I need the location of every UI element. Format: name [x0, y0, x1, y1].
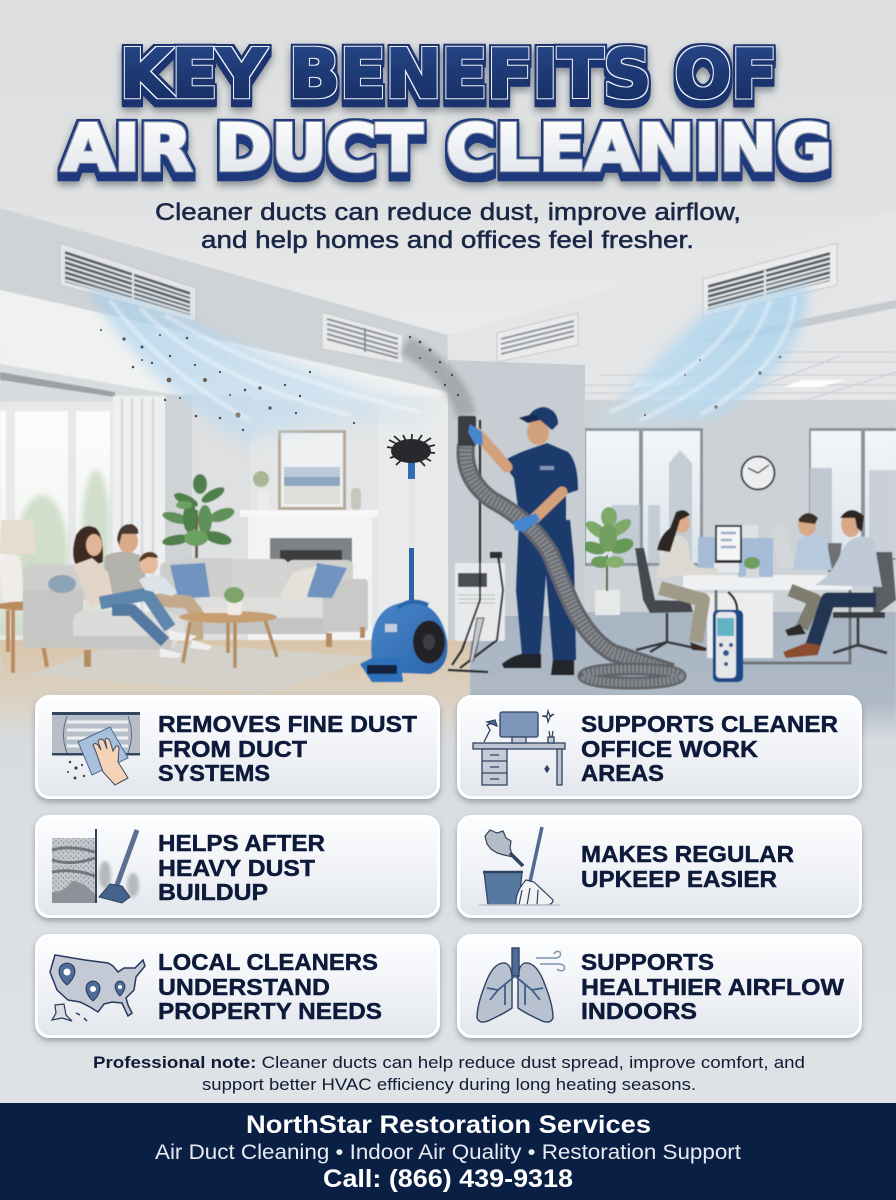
card: local cleaners	[36, 936, 438, 1036]
dust and airflow streams	[85, 284, 808, 445]
subtitle: and help homes and offices feel fresher.	[201, 227, 694, 254]
hose	[466, 445, 672, 672]
white column	[378, 395, 448, 642]
professional note: Professional note: Cleaner ducts can help reduce dust spread, improve comfort, and	[93, 1053, 805, 1072]
card text	[158, 830, 325, 905]
card text: INDOORS	[581, 998, 697, 1024]
air blower	[360, 602, 447, 682]
icon: office desk	[473, 711, 565, 785]
office man with headset	[783, 510, 896, 658]
card text	[158, 949, 382, 1024]
worker legs	[516, 520, 576, 660]
wall art	[278, 430, 346, 510]
wall clock	[742, 456, 774, 490]
card text: SUPPORTS CLEANER	[581, 711, 838, 737]
scene: office	[448, 210, 896, 740]
professional note	[93, 1053, 805, 1094]
card text: SYSTEMS	[158, 760, 270, 786]
card text: HELPS AFTER	[158, 830, 325, 856]
office plant	[581, 507, 636, 615]
card text: UPKEEP EASIER	[581, 866, 777, 892]
card text	[581, 711, 838, 786]
plant	[161, 474, 236, 558]
card text	[158, 711, 417, 786]
worker with hose	[458, 407, 680, 683]
card text: UNDERSTAND	[158, 974, 330, 1000]
icon: lungs with wind	[477, 948, 564, 1022]
brush pole	[387, 434, 435, 604]
center column wall	[448, 360, 585, 640]
office ceiling tiles	[585, 293, 896, 402]
worker torso	[505, 443, 578, 522]
sofa	[23, 558, 368, 667]
card text: REMOVES FINE DUST	[158, 711, 417, 737]
middle left vent	[322, 312, 403, 364]
background ceiling	[0, 0, 896, 345]
card: heavy dust buildup	[36, 816, 438, 916]
card: removes fine dust	[36, 696, 438, 798]
left ceiling vent	[60, 243, 196, 322]
phone number: Call: (866) 439-9318	[323, 1165, 573, 1193]
card text: PROPERTY NEEDS	[158, 998, 382, 1024]
icon: dust and vacuum	[52, 829, 139, 903]
card text: LOCAL CLEANERS	[158, 949, 378, 975]
cushions	[48, 563, 347, 599]
head and cap	[527, 419, 549, 445]
office woman at desk	[635, 510, 718, 652]
card: healthier airflow	[458, 936, 860, 1036]
card text	[581, 949, 844, 1024]
office man with glasses	[785, 513, 842, 636]
title line 1: KEY BENEFITS OF	[120, 35, 777, 113]
icon: duster bucket and mop	[479, 827, 560, 905]
card text: MAKES REGULAR	[581, 841, 794, 867]
card text: BUILDUP	[158, 879, 268, 905]
office windows	[584, 428, 896, 566]
professional note: support better HVAC efficiency during long heating seasons.	[202, 1075, 696, 1094]
title	[62, 35, 832, 186]
card: regular upkeep	[458, 816, 860, 916]
portable air unit	[448, 420, 505, 672]
lamp and side table	[0, 520, 52, 673]
card text: OFFICE WORK	[581, 736, 758, 762]
family	[73, 524, 212, 658]
card text: HEALTHIER AIRFLOW	[581, 974, 844, 1000]
subtitle	[155, 199, 741, 254]
lower background behind cards	[0, 690, 896, 1105]
window	[0, 402, 113, 640]
scene: living room	[0, 208, 470, 760]
curtain	[113, 396, 165, 644]
mantel decor	[253, 471, 361, 510]
coffee table	[179, 587, 277, 668]
office wall	[585, 400, 896, 615]
floor	[0, 640, 470, 760]
services line: Air Duct Cleaning • Indoor Air Quality • Restoration Support	[155, 1141, 741, 1164]
card text: SUPPORTS	[581, 949, 714, 975]
gloves	[468, 424, 483, 445]
right ceiling vent	[703, 243, 837, 317]
card: office work areas	[458, 696, 860, 798]
footer band	[0, 1103, 896, 1200]
card text: FROM DUCT	[158, 736, 307, 762]
rug	[27, 640, 373, 693]
card text	[581, 841, 794, 892]
carpet	[470, 612, 896, 740]
icon: US map with pins	[50, 955, 145, 1021]
card text: HEAVY DUST	[158, 855, 315, 881]
subtitle: Cleaner ducts can reduce dust, improve airflow,	[155, 199, 741, 226]
card text: AREAS	[581, 760, 664, 786]
handheld meter	[713, 592, 743, 682]
dust plume	[405, 345, 466, 416]
middle right vent	[497, 313, 578, 362]
desk	[683, 525, 852, 663]
fireplace	[240, 510, 383, 642]
company name: NorthStar Restoration Services	[246, 1111, 651, 1139]
icon: vent cleaning hand	[52, 712, 140, 785]
title line 2: AIR DUCT CLEANING	[62, 112, 832, 186]
